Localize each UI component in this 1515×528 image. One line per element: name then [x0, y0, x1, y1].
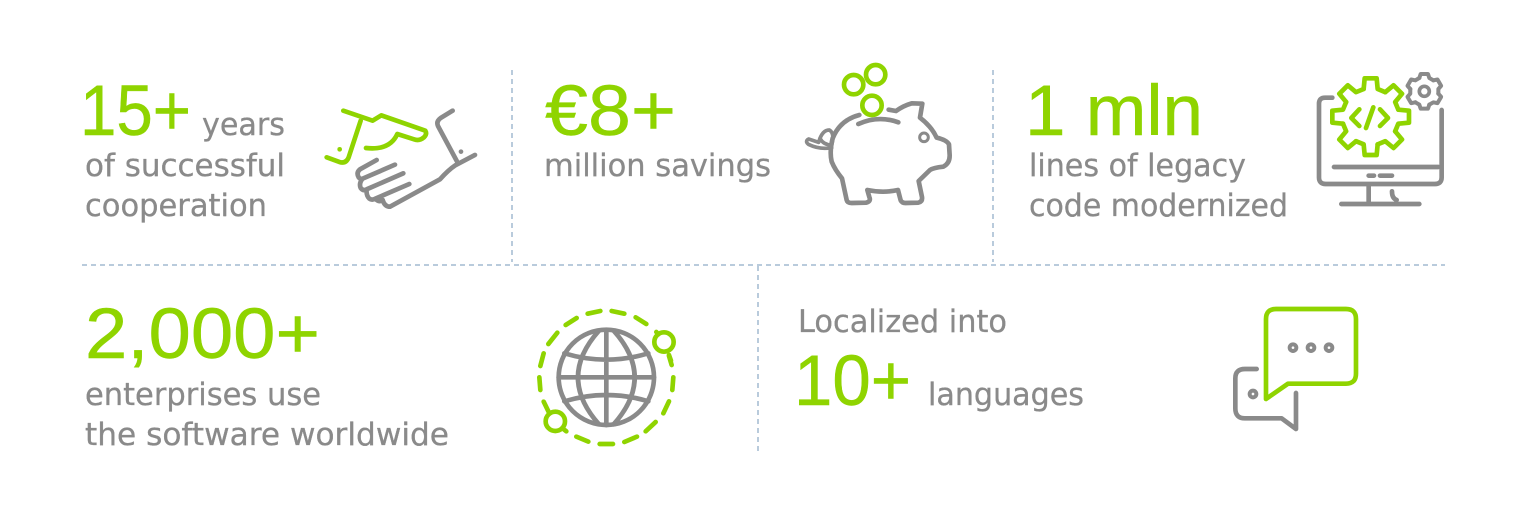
text: lines of legacy code modernized [1029, 148, 1288, 224]
text: years of successful cooperation: of successful [85, 148, 285, 184]
stat: 2,000+: 2,000+ [85, 295, 320, 374]
icon: large code gear [1332, 78, 1409, 155]
panel: 15+ years of cooperation [80, 72, 475, 224]
text: years of successful cooperation [85, 107, 285, 224]
icon: small gear [1405, 74, 1444, 109]
panel: 2,000+ enterprises [85, 295, 674, 453]
icon: speech bubbles [1235, 309, 1356, 429]
text: million savings: million savings [544, 148, 771, 184]
stat: 15+: 15+ [80, 72, 191, 151]
text: years of successful cooperation: cooperation [85, 188, 267, 224]
icon: piggy bank with coins [807, 65, 950, 203]
text: enterprises use the software worldwide [85, 377, 449, 453]
icon: handshake [327, 111, 475, 207]
text: languages: languages [928, 377, 1084, 413]
text: enterprises use the software worldwide: enterprises use [85, 377, 321, 413]
panel: localized into 10+ languages [794, 304, 1356, 429]
panel: 8+ million savings [544, 65, 950, 203]
stat: 1 mln: 1 mln [1025, 72, 1203, 151]
icon: monitor with gears [1319, 74, 1444, 204]
text: enterprises use the software worldwide: the software worldwide [85, 417, 449, 453]
stat: 10+: 10+ [794, 342, 911, 421]
icon: globe with orbit [539, 311, 674, 444]
text: years of successful cooperation: years [202, 107, 285, 143]
text: Localized into: Localized into [798, 304, 1007, 340]
stat: €8+: €8+ [545, 72, 676, 151]
text: lines of legacy code modernized: lines of legacy [1029, 148, 1246, 184]
text: lines of legacy code modernized: code modernized [1029, 188, 1288, 224]
panel: 1 mln lines of code [1025, 72, 1444, 224]
